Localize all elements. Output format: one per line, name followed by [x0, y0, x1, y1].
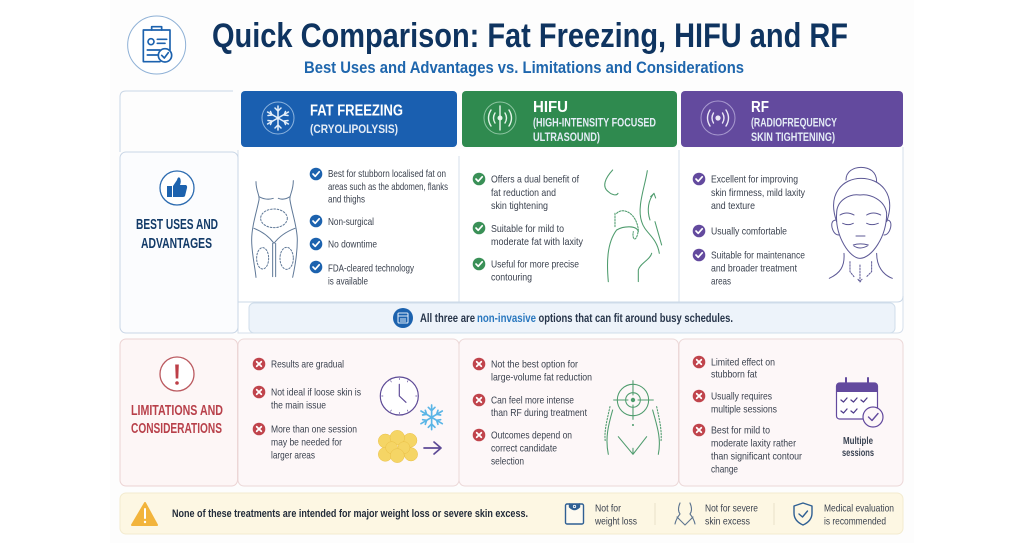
- bullet list: fat freezing advantages: [310, 168, 448, 288]
- bullet: more sessions: larger areas: [271, 450, 315, 462]
- bullet: firmness: Excellent for improving: [711, 174, 798, 186]
- bullet: mild to moderate laxity: [693, 424, 802, 476]
- panel: best uses frame: [238, 147, 903, 333]
- label: medical evaluation: is recommended: [824, 516, 886, 528]
- label: not for severe skin excess: skin excess: [705, 516, 750, 528]
- bullet: stubborn fat: areas such as the abdomen, flanks: [328, 181, 448, 193]
- bullet: mild to moderate fat: moderate fat with laxity: [491, 236, 584, 248]
- icon: scale: [566, 504, 584, 524]
- bullet: maintenance: Suitable for maintenance: [711, 250, 805, 262]
- bullet: precise contouring: [473, 258, 579, 284]
- caption: multiple sessions: Multiple: [843, 435, 873, 447]
- illustration: face and neck: [829, 167, 892, 282]
- bullet: large volume: Not the best option for: [491, 358, 578, 370]
- caption: multiple sessions: sessions: [842, 447, 874, 459]
- panel: limitations and considerations label: [120, 339, 238, 486]
- header: RF: (RADIOFREQUENCY: [751, 118, 837, 130]
- bullet: FDA-cleared: is available: [328, 276, 368, 288]
- arrow: reduction: [424, 442, 441, 454]
- icon: snowflake: [421, 405, 442, 430]
- bullet: gradual: [253, 358, 344, 370]
- bullet: stubborn fat: and thighs: [328, 194, 365, 206]
- bullet: more sessions: may be needed for: [271, 436, 342, 448]
- panel: RF limitations: [679, 339, 903, 486]
- bullet: large volume: large-volume fat reduction: [491, 372, 592, 384]
- bullet: firmness: skin firmness, mild laxity: [711, 187, 806, 199]
- panel: best uses and advantages label: [120, 152, 238, 333]
- bullet: stubborn fat: [310, 168, 448, 206]
- header: HIFU: HIFU: [533, 99, 568, 116]
- subtitle: Best Uses and Advantages vs. Limitations and Considerations: [304, 59, 744, 77]
- bullet: non-surgical: Non-surgical: [328, 216, 374, 228]
- bullet: more sessions: More than one session: [271, 424, 357, 436]
- icon: fat cells: [378, 430, 418, 463]
- bullet: candidate selection: [473, 429, 572, 468]
- bullet list: RF advantages: [693, 173, 806, 288]
- bullet: limited effect: Limited effect on: [711, 356, 775, 368]
- bullet: mild to moderate laxity: moderate laxity rather: [711, 438, 796, 450]
- label: not for severe skin excess: [705, 502, 758, 528]
- header: HIFU: (HIGH-INTENSITY FOCUSED: [533, 118, 656, 130]
- icon: clipboard checklist: [128, 16, 186, 74]
- bullet: maintenance: [693, 249, 805, 288]
- panel: limitations and considerations label: LIMITATIONS AND: [131, 403, 223, 419]
- illustration: side profile body with lift arrows: [605, 170, 662, 282]
- bullet: dual benefit: skin tightening: [491, 200, 548, 212]
- icon: calendar: [393, 308, 413, 328]
- label: not for weight loss: [594, 502, 637, 528]
- banner: important notice: [120, 493, 903, 534]
- bullet: gradual: Results are gradual: [271, 358, 344, 370]
- label: medical evaluation: Medical evaluation: [824, 502, 894, 514]
- bullet: candidate selection: Outcomes depend on: [491, 430, 572, 442]
- panel: fat freezing limitations: [238, 339, 459, 486]
- label: not for weight loss: Not for: [595, 502, 621, 514]
- bullet: mild to moderate laxity: change: [711, 464, 738, 476]
- bullet: mild to moderate fat: [473, 222, 584, 248]
- header: fat freezing: FAT FREEZING: [310, 102, 403, 120]
- panel: limitations and considerations label: CONSIDERATIONS: [131, 421, 222, 437]
- bullet: loose skin: [253, 386, 361, 412]
- callout: non-invasive: All three are: [420, 313, 475, 325]
- bullet: more sessions: [253, 423, 357, 462]
- illustration: front torso with dashed zones: [252, 181, 297, 277]
- callout: non-invasive: non-invasive: [477, 313, 536, 325]
- bullet: maintenance: and broader treatment: [711, 262, 797, 274]
- bullet: precise contouring: contouring: [491, 272, 532, 284]
- header: fat freezing: (CRYOLIPOLYSIS): [310, 124, 398, 136]
- panel: HIFU limitations: [459, 339, 678, 486]
- bullet: multiple sessions: Usually requires: [711, 390, 772, 402]
- bullet: mild to moderate laxity: Best for mild to: [711, 424, 770, 436]
- bullet: FDA-cleared: FDA-cleared technology: [328, 262, 415, 274]
- header: RF: [681, 91, 903, 147]
- bullet: candidate selection: selection: [491, 456, 524, 468]
- header: RF: RF: [751, 99, 769, 116]
- header: fat freezing: [241, 91, 457, 147]
- bullet list: HIFU advantages: [473, 173, 584, 284]
- bullet: limited effect: stubborn fat: [711, 368, 757, 380]
- callout: non-invasive: options that can fit around busy schedules.: [538, 313, 733, 325]
- bullet: intensity: than RF during treatment: [491, 407, 587, 419]
- title: Quick Comparison: Fat Freezing, HIFU and RF: [212, 17, 848, 55]
- bullet: no downtime: No downtime: [328, 238, 377, 250]
- bullet: multiple sessions: multiple sessions: [711, 404, 777, 416]
- bullet: firmness: and texture: [711, 200, 755, 212]
- label: medical evaluation: [824, 502, 894, 528]
- bullet: loose skin: the main issue: [271, 400, 326, 412]
- bullet: dual benefit: fat reduction and: [491, 187, 556, 199]
- bullet: comfortable: Usually comfortable: [711, 226, 787, 238]
- icon: warning triangle: [132, 503, 157, 525]
- label: not for weight loss: weight loss: [594, 516, 637, 528]
- bullet: loose skin: Not ideal if loose skin is: [271, 386, 361, 398]
- bullet: maintenance: areas: [711, 276, 731, 288]
- bullet: FDA-cleared: [310, 261, 415, 288]
- panel: best uses and advantages label: BEST USES AND: [136, 217, 218, 233]
- bullet: large volume: [473, 358, 592, 384]
- bullet: mild to moderate laxity: than significant contour: [711, 450, 802, 462]
- notice text: None of these treatments are intended for major weight loss or severe skin excess.: [172, 508, 528, 520]
- icon: target over abdomen: [605, 381, 661, 454]
- icon: calendar with check: [836, 378, 883, 427]
- panel: best uses and advantages label: ADVANTAGES: [141, 236, 212, 252]
- callout: non-invasive: [249, 303, 895, 333]
- empty corner cell: [120, 91, 233, 152]
- bullet: intensity: Can feel more intense: [491, 394, 574, 406]
- header: HIFU: ULTRASOUND): [533, 132, 600, 144]
- bullet: dual benefit: Offers a dual benefit of: [491, 174, 579, 186]
- icon: clock: [380, 377, 418, 415]
- bullet: limited effect: [693, 356, 775, 380]
- bullet: firmness: [693, 173, 806, 212]
- icon: shield check: [794, 503, 812, 525]
- bullet: stubborn fat: Best for stubborn localised fat on: [328, 168, 446, 180]
- icon: waist outline: [675, 503, 695, 525]
- bullet: multiple sessions: [693, 390, 777, 416]
- label: not for severe skin excess: Not for severe: [705, 502, 758, 514]
- header: HIFU: [462, 91, 677, 147]
- bullet: mild to moderate fat: Suitable for mild to: [491, 223, 564, 235]
- header: RF: SKIN TIGHTENING): [751, 132, 835, 144]
- bullet: precise contouring: Useful for more precise: [491, 258, 579, 270]
- caption: multiple sessions: [842, 435, 874, 459]
- bullet: intensity: [473, 394, 587, 419]
- bullet: dual benefit: [473, 173, 579, 212]
- bullet: candidate selection: correct candidate: [491, 442, 557, 454]
